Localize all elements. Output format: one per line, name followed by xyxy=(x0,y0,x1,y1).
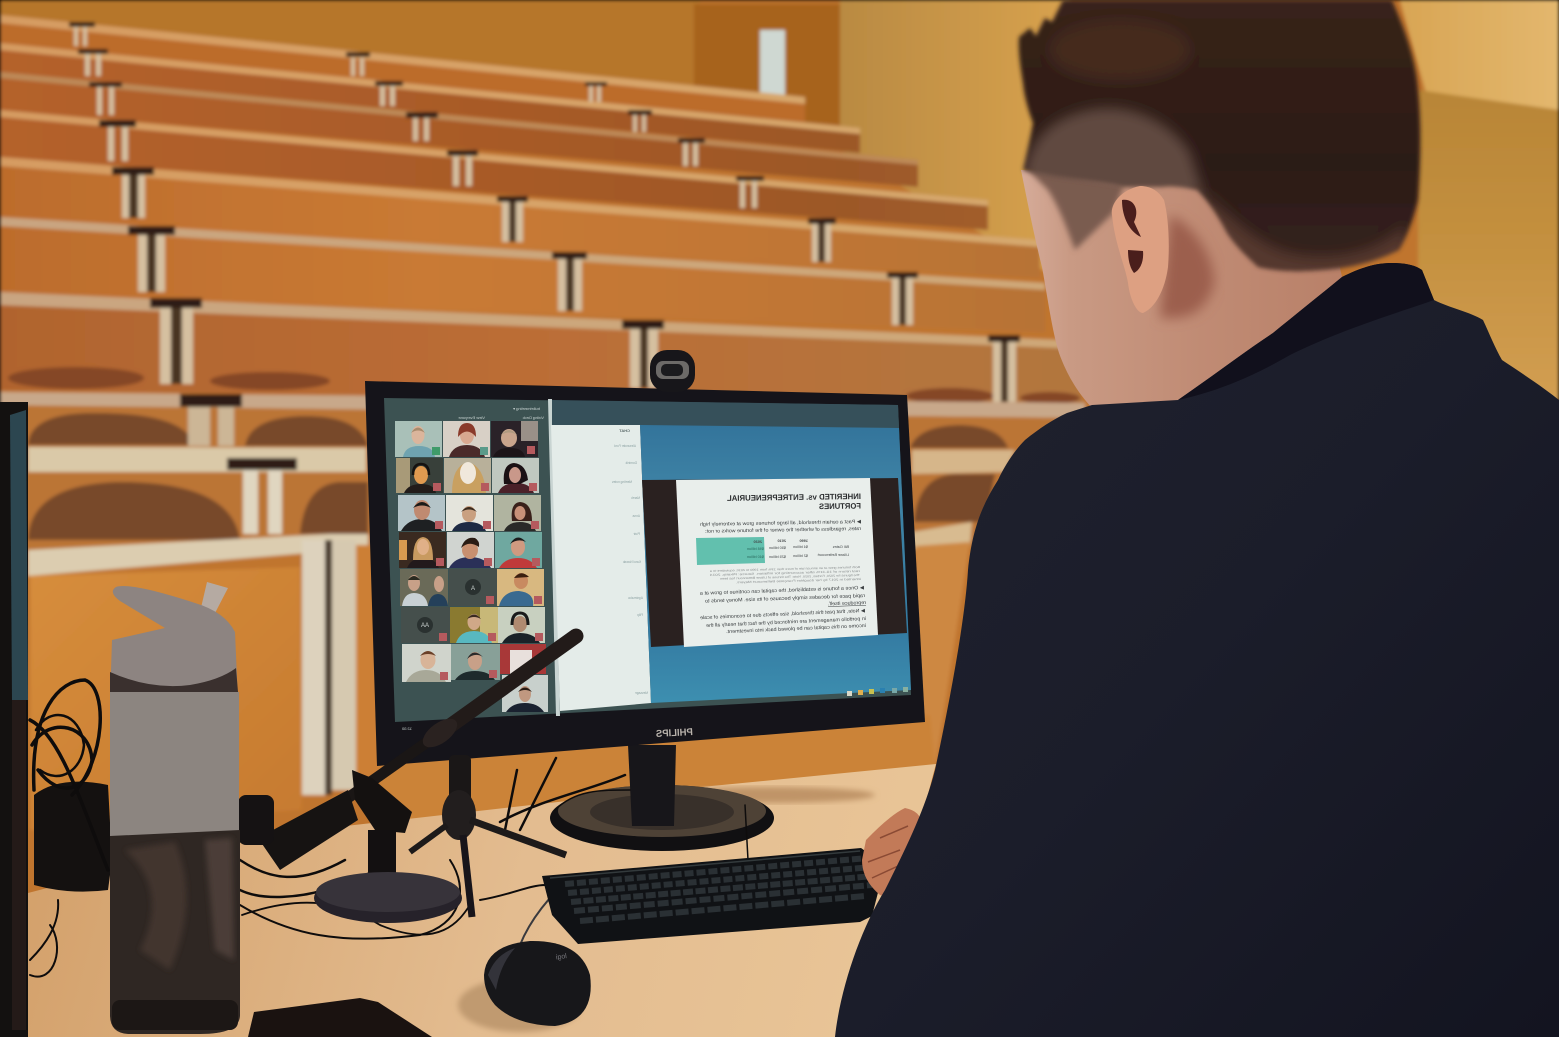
slide table: $25 billion xyxy=(769,555,786,559)
water bottle xyxy=(110,582,240,1034)
video call grid xyxy=(395,421,548,712)
panel divider xyxy=(548,399,560,716)
slide third bullet xyxy=(700,608,866,635)
slide first bullet: rates, regardless of whether the owner of the fortune works or not: xyxy=(705,526,861,535)
lower bench row xyxy=(0,405,1070,555)
webcam xyxy=(650,350,695,392)
slide table: 2010 xyxy=(778,539,786,543)
monitor base xyxy=(550,785,774,851)
keyboard shadow base xyxy=(542,848,885,944)
title bar text: View Everyone xyxy=(723,420,750,425)
clear lower body xyxy=(110,830,240,1034)
bench tier G xyxy=(0,292,1085,405)
chat panel: Karol Nowak xyxy=(623,560,641,564)
bench supports xyxy=(69,22,1020,402)
hair mass xyxy=(1019,0,1420,290)
monitor xyxy=(365,350,925,766)
wood panel left of monitor xyxy=(30,567,302,830)
hair fades and tone patches xyxy=(1023,20,1410,290)
slide table: $98 billion xyxy=(747,547,764,551)
chat panel: Dominik xyxy=(625,461,637,465)
row 3 xyxy=(398,495,445,531)
chat panel: CHAT xyxy=(619,428,630,433)
right wall lower xyxy=(1418,90,1559,400)
desk mic stand xyxy=(368,830,396,885)
screen xyxy=(384,398,911,731)
slide footnote xyxy=(709,565,861,584)
clasped hands xyxy=(862,808,921,897)
bench tier F xyxy=(0,217,1045,332)
microphone xyxy=(258,636,576,923)
chat panel: Marek xyxy=(631,496,640,500)
slide page xyxy=(676,478,878,647)
ear xyxy=(1112,186,1169,313)
slide table: $2 billion xyxy=(793,554,808,558)
keyboard xyxy=(542,848,885,944)
back seat cushions xyxy=(8,367,1080,404)
slide third bullet: income on this capital can be plowed back into investment. xyxy=(726,623,866,635)
monitor neck xyxy=(628,745,676,826)
shock mount clip xyxy=(258,790,358,870)
slide footnote: The figures for 2020, Forbes, 2020. Note: The fortune of Liliane Bettencourt has been xyxy=(720,573,860,581)
slide third bullet: in portfolio management are reinforced by the fact that nearly all the xyxy=(706,616,866,629)
bench tier B xyxy=(0,43,860,153)
monitor stand xyxy=(550,745,774,851)
bench tier A xyxy=(0,15,805,122)
lower ledges xyxy=(28,394,1015,576)
video call grid: A xyxy=(471,586,475,592)
chat panel: Meeting notes xyxy=(612,480,632,484)
row 5 xyxy=(400,569,448,606)
logo strip highlight xyxy=(550,851,860,878)
tripod xyxy=(410,755,566,917)
slide table: $40 billion xyxy=(747,555,764,559)
shadow behind ear xyxy=(1160,215,1214,318)
title bar text: View Everyone xyxy=(458,415,485,420)
slide table: $50 billion xyxy=(769,546,786,550)
slide footnote: Both fortunes grew at an annual rate of more than 13% from 1990 to 2010, equivalent to a xyxy=(710,565,860,573)
chat panel: Anna xyxy=(632,514,640,518)
slide second bullet: reproduce itself. xyxy=(828,600,866,607)
title bar text: Voting Deck xyxy=(874,421,895,426)
shared slide backdrop xyxy=(640,425,911,703)
slide first bullet xyxy=(700,519,861,535)
desk shadow under the monitor xyxy=(665,787,875,803)
slide table xyxy=(696,537,849,565)
desk xyxy=(28,764,936,1037)
slide second bullet: rapid pace for decades simply because of its size. Money tends to xyxy=(705,593,865,605)
right window title bar xyxy=(552,400,899,428)
slide table: Bill Gates xyxy=(833,545,849,549)
slide heading xyxy=(727,492,861,511)
slide second bullet xyxy=(700,585,866,607)
mouse: logi xyxy=(555,953,567,962)
row 8 xyxy=(502,675,548,712)
title bar text: Voting Deck xyxy=(523,415,544,420)
door with window xyxy=(694,4,840,129)
right wall upper xyxy=(1400,0,1559,110)
straw xyxy=(200,582,228,615)
lid dark band xyxy=(110,668,238,695)
title bar text: bulletmeeting ▾ xyxy=(513,406,540,411)
chat panel: Message xyxy=(635,691,648,695)
title bar text: bulletmeeting ▾ xyxy=(865,412,892,417)
slide table: 1990 xyxy=(800,539,808,543)
side wall xyxy=(840,0,1070,280)
boom arm and capsule xyxy=(450,636,576,726)
slide heading: INHERITED vs. ENTREPRENEURIAL xyxy=(727,492,861,503)
front hall rail xyxy=(0,392,1085,418)
bench tier C xyxy=(0,72,918,187)
row 6 xyxy=(401,607,450,643)
chat panel xyxy=(551,425,651,711)
title bar text xyxy=(458,406,895,426)
phone xyxy=(248,998,432,1037)
grey sleeve xyxy=(110,692,239,838)
clock: 12:30 xyxy=(401,726,412,731)
slide heading: FORTUNES xyxy=(818,502,861,511)
chat panel: Alexander Ford xyxy=(614,444,636,448)
neck and face xyxy=(1021,170,1345,408)
chat panel: Piotr xyxy=(633,532,640,536)
mouse shadow xyxy=(458,978,582,1032)
back wall xyxy=(0,0,700,110)
lower row cushions xyxy=(28,413,1008,540)
adapter behind bottle xyxy=(238,795,274,845)
row 1 xyxy=(395,421,442,457)
slide table: 2020 xyxy=(754,540,762,544)
slide second bullet: ▶ Once a fortune is established, the capital can continue to grow at a xyxy=(700,585,864,597)
cable bundle xyxy=(30,680,748,977)
slide table: $4 billion xyxy=(793,545,808,549)
bench tier E xyxy=(0,157,1040,278)
brand label: PHILIPS xyxy=(655,727,693,740)
slide footnote: inherited in 2017 by her daughter Françoise Bettencourt Meyers. xyxy=(736,577,861,584)
row 2 xyxy=(396,458,443,493)
slide third bullet: ▶ Note, that past this threshold, size effects due to economies of scale xyxy=(700,608,865,621)
mouse xyxy=(458,941,591,1032)
bezel xyxy=(365,381,925,766)
left edge foreground monitor xyxy=(0,402,28,1037)
wood panel right of monitor xyxy=(600,542,970,790)
chat panel: Agnieszka xyxy=(628,596,643,600)
dark cable mass xyxy=(34,782,112,892)
sweater xyxy=(835,263,1559,1037)
slide footnote: real return of 10-11% after accounting for inflation. Source: Piketty, 2014 xyxy=(709,569,860,577)
lecturer xyxy=(835,0,1559,1037)
mouse body xyxy=(484,941,591,1026)
grey posts xyxy=(302,540,380,795)
hair xyxy=(1019,0,1420,290)
row 6: AA xyxy=(421,623,429,629)
bench tier D xyxy=(0,110,988,230)
row 7 xyxy=(402,644,451,682)
slide first bullet: ▶ Past a certain threshold, all large fortunes grow at extremely high xyxy=(700,519,861,528)
bottle lid xyxy=(110,586,238,700)
taskbar icons xyxy=(847,687,908,696)
key rows xyxy=(565,858,874,921)
sideburn fade xyxy=(1026,168,1124,250)
slide table: Liliane Bettencourt xyxy=(817,553,849,557)
chat panel: Filip xyxy=(637,613,643,617)
collar xyxy=(1178,263,1434,400)
row 4 xyxy=(399,532,446,568)
